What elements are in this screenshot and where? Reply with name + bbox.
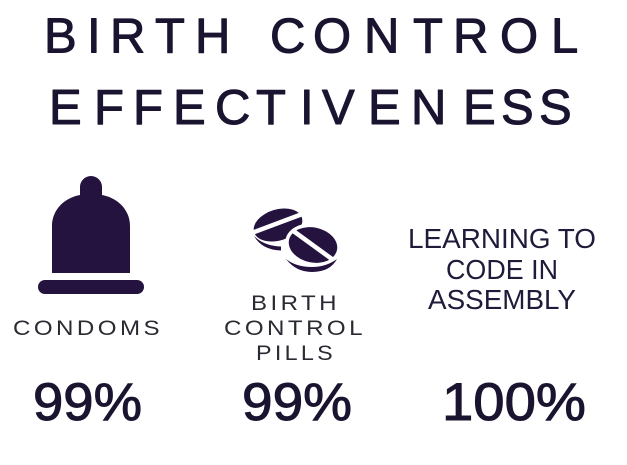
icon: condom	[38, 176, 144, 294]
statistic: assembly 100%: 100%	[442, 373, 586, 432]
label: condoms: CONDOMS	[13, 317, 163, 340]
statistic: pills 99%: 99%	[242, 373, 352, 432]
label: birth control pills: BIRTH	[251, 292, 340, 315]
label: learning to code in assembly	[408, 223, 596, 315]
title	[44, 10, 578, 135]
title: BIRTH CONTROL	[44, 10, 578, 64]
label: birth control pills	[224, 292, 366, 365]
label: learning to code in assembly: CODE IN	[446, 254, 558, 285]
icon: pills	[249, 203, 345, 272]
pill one	[249, 203, 306, 250]
label: birth control pills: PILLS	[256, 342, 336, 365]
title: EFFECTIVENESS	[49, 81, 572, 135]
statistic: condoms 99%: 99%	[33, 373, 142, 432]
label: learning to code in assembly: LEARNING TO	[408, 223, 596, 254]
label: birth control pills: CONTROL	[224, 317, 366, 340]
label: learning to code in assembly: ASSEMBLY	[428, 284, 576, 315]
pill two	[281, 219, 345, 272]
